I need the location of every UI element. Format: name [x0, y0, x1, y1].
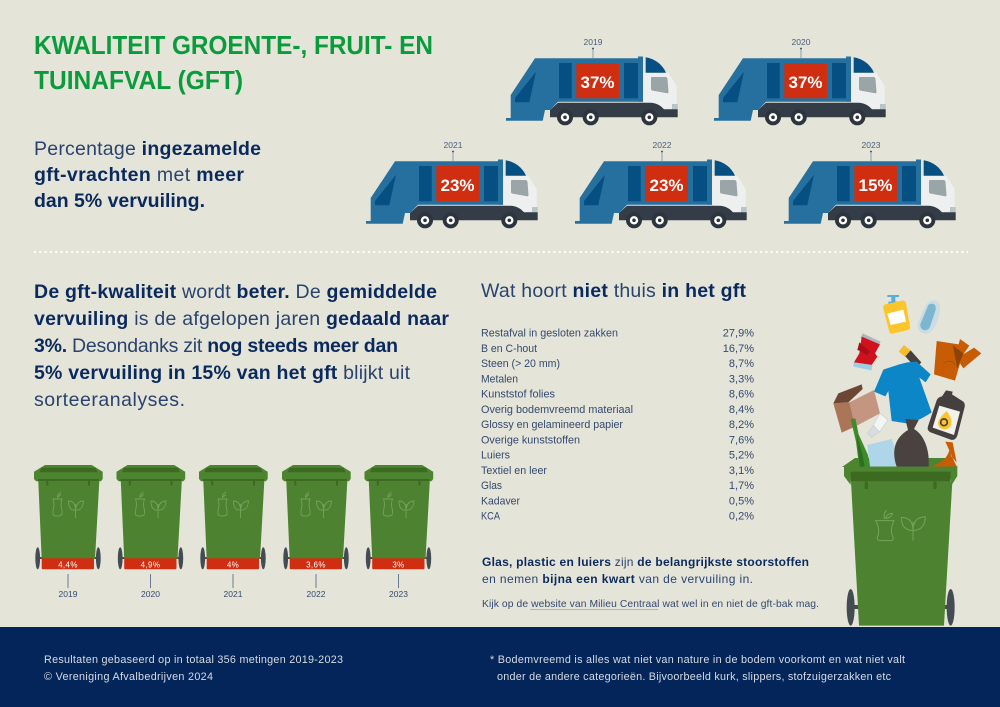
table: stoorstoffen: 0,2% — [729, 510, 754, 522]
callout: belangrijkste stoorstoffen: en nemen bijna een kwart van de vervuiling in. — [482, 572, 753, 586]
table: stoorstoffen: Kadaver — [481, 495, 520, 507]
icon: apple core and leaf — [876, 510, 925, 541]
intro paragraph: vervuiling is de afgelopen jaren gedaald naar — [34, 308, 449, 330]
icon: brown paper bag — [934, 339, 981, 381]
small bin 2023: 3%: 3% — [392, 560, 405, 569]
small bin 2022: 3,6%: 2022 — [307, 589, 326, 599]
subtitle: percentage ingezamelde gft-vrachten: gft-vrachten met meer — [34, 164, 244, 186]
footer left: source — [44, 654, 343, 683]
truck 2022: 23%: 23% — [649, 176, 684, 195]
table: stoorstoffen: 7,6% — [729, 434, 754, 446]
table: stoorstoffen: B en C-hout — [481, 343, 537, 355]
table: stoorstoffen: 8,2% — [729, 419, 754, 431]
table: stoorstoffen: Overig bodemvreemd materiaal — [481, 404, 633, 416]
footer right: footnote: * Bodemvreemd is alles wat niet van nature in de bodem voorkomt en wat niet valt — [490, 654, 905, 666]
table: stoorstoffen: Glas — [481, 480, 502, 492]
footer left: source: Resultaten gebaseerd op in totaal 356 metingen 2019-2023 — [44, 654, 343, 666]
icon: high heel shoe — [931, 442, 957, 467]
intro paragraph — [34, 281, 449, 411]
callout: belangrijkste stoorstoffen — [482, 555, 809, 586]
subtitle: percentage ingezamelde gft-vrachten — [34, 138, 261, 212]
icon: soap pump bottle — [883, 295, 910, 334]
table: stoorstoffen: 8,7% — [729, 358, 754, 370]
small bin 2020: 4,9%: 4,9% — [141, 560, 160, 569]
icon: glass bottle — [851, 418, 870, 468]
icon: blue t-shirt — [874, 362, 932, 423]
table: stoorstoffen: 8,4% — [729, 404, 754, 416]
icon: battery — [899, 345, 921, 368]
footer left: source: © Vereniging Afvalbedrijven 2024 — [44, 671, 213, 683]
truck 2019: 37%: 2019 — [584, 37, 603, 47]
small bin 2019: 4,4%: 2019 — [59, 589, 78, 599]
table: stoorstoffen — [481, 328, 754, 522]
truck 2019: 37%: 37% — [580, 73, 615, 92]
large green bin — [844, 467, 957, 626]
small bin 2022: 3,6%: 3,6% — [306, 560, 326, 569]
table: stoorstoffen: 8,6% — [729, 388, 754, 400]
table: stoorstoffen: Glossy en gelamineerd papier — [481, 419, 623, 431]
small bin 2023: 3%: 2023 — [389, 589, 408, 599]
table: stoorstoffen: Metalen — [481, 373, 518, 385]
table: stoorstoffen: Steen (> 20 mm) — [481, 358, 560, 370]
small bin 2023: 3% — [364, 465, 433, 599]
small bin 2021: 4%: 4% — [227, 560, 239, 569]
footer right: footnote — [490, 654, 905, 683]
title: TUINAFVAL (GFT) — [34, 65, 243, 95]
truck 2021: 23%: 2021 — [444, 140, 463, 150]
truck 2023: 15%: 15% — [858, 176, 893, 195]
truck 2019: 37% — [506, 37, 678, 125]
small bin 2019: 4,4% — [34, 465, 103, 599]
table: stoorstoffen: Restafval in gesloten zakken — [481, 328, 618, 340]
link text: milieu centraal: Kijk op de website van Milieu Centraal wat wel in en niet de gft-bak mag. — [482, 599, 819, 610]
footer band — [0, 627, 1000, 707]
subtitle: percentage ingezamelde gft-vrachten: Percentage ingezamelde — [34, 138, 261, 160]
truck 2021: 23%: 23% — [440, 176, 475, 195]
icon: cardboard box — [833, 384, 880, 433]
table: stoorstoffen: 3,3% — [729, 373, 754, 385]
intro paragraph: sorteeranalyses. — [34, 389, 185, 411]
table: stoorstoffen: 3,1% — [729, 465, 754, 477]
large bin: back rim — [842, 458, 958, 467]
small bin 2022: 3,6% — [282, 465, 351, 599]
small bin 2020: 4,9% — [116, 465, 185, 599]
table: stoorstoffen: 0,5% — [729, 495, 754, 507]
table: stoorstoffen: 16,7% — [723, 343, 754, 355]
icon: sanitary pad — [918, 300, 940, 334]
truck 2022: 23%: 2022 — [653, 140, 672, 150]
truck 2020: 37% — [714, 37, 886, 125]
icon: diaper — [867, 439, 899, 467]
table: stoorstoffen: 27,9% — [723, 328, 754, 340]
small bin 2020: 4,9%: 2020 — [141, 589, 160, 599]
intro paragraph: 3%. Desondanks zit nog steeds meer dan — [34, 335, 398, 357]
table: stoorstoffen: Textiel en leer — [481, 465, 547, 477]
truck 2023: 15% — [784, 140, 956, 228]
truck 2021: 23% — [366, 140, 538, 228]
icon: jerrycan with oil label — [928, 390, 965, 440]
icon: crushed red can — [853, 333, 881, 370]
table: stoorstoffen: KCA — [481, 510, 501, 522]
truck 2020: 37%: 37% — [788, 73, 823, 92]
table: stoorstoffen: 1,7% — [729, 480, 754, 492]
intro paragraph: De gft-kwaliteit wordt beter. De gemiddelde — [34, 281, 437, 303]
table: stoorstoffen: Luiers — [481, 450, 510, 462]
truck 2020: 37%: 2020 — [792, 37, 811, 47]
table: stoorstoffen: Overige kunststoffen — [481, 434, 580, 446]
small bin 2021: 4%: 2021 — [224, 589, 243, 599]
subtitle: percentage ingezamelde gft-vrachten: dan 5% vervuiling. — [34, 190, 205, 212]
icon: black garbage bag — [894, 419, 929, 467]
title: KWALITEIT GROENTE-, FRUIT- EN — [34, 30, 433, 60]
title — [34, 30, 433, 95]
truck 2023: 15%: 2023 — [862, 140, 881, 150]
illustration: waste items above bin — [833, 295, 981, 468]
callout: belangrijkste stoorstoffen: Glas, plastic en luiers zijn de belangrijkste stoorstoffen — [482, 555, 809, 569]
small bin 2021: 4% — [199, 465, 268, 599]
table: stoorstoffen: Kunststof folies — [481, 388, 555, 400]
truck 2022: 23% — [575, 140, 747, 228]
small bin 2019: 4,4%: 4,4% — [58, 560, 78, 569]
heading: wat hoort niet thuis: Wat hoort niet thuis in het gft — [481, 280, 746, 302]
table: stoorstoffen: 5,2% — [729, 450, 754, 462]
icon: energy saving bulb — [867, 413, 888, 438]
intro paragraph: 5% vervuiling in 15% van het gft blijkt uit — [34, 362, 411, 384]
footer right: footnote: onder de andere categorieën. Bijvoorbeeld kurk, slippers, stofzuigerzakken etc — [497, 671, 892, 683]
